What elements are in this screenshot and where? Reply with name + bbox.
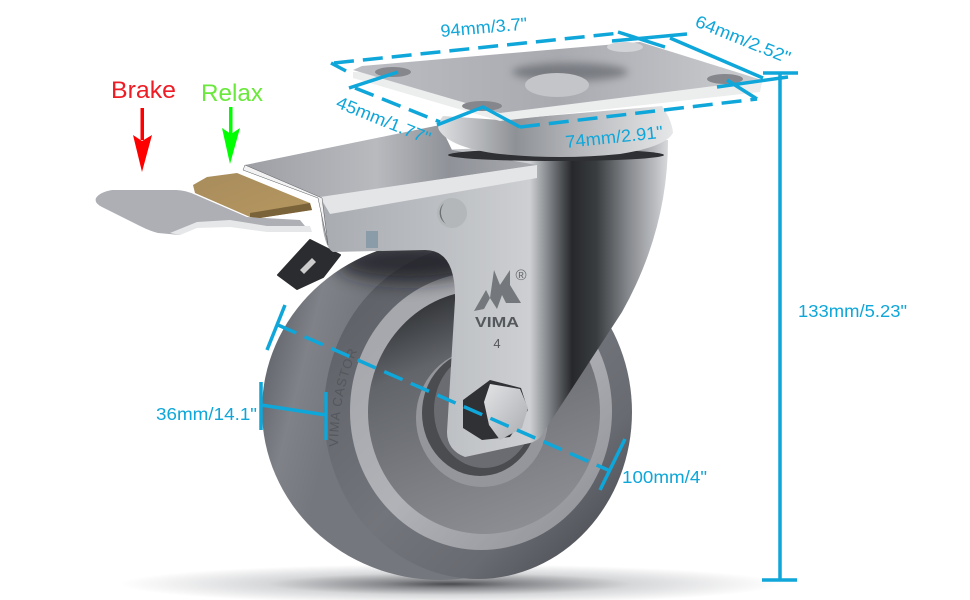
mounting hole front left [462, 101, 502, 111]
hub centre [434, 352, 534, 468]
dimension: hole spacing 74mm [437, 80, 757, 127]
label 74mm: 74mm/2.91" [564, 122, 664, 152]
label 45mm: 45mm/1.77" [334, 92, 434, 148]
floor shadow [120, 564, 780, 600]
plate shading [512, 63, 628, 81]
label 133mm: 133mm/5.23" [798, 301, 907, 321]
axle nut [463, 380, 528, 440]
dimension: tread width 36mm [261, 382, 326, 440]
arm bright fold [320, 165, 537, 214]
plate edge [353, 72, 762, 121]
tire front face [324, 245, 632, 579]
wheel dish [368, 290, 600, 534]
logo emblem [474, 270, 521, 311]
logo text: VIMA [475, 314, 519, 331]
relax label: Relax [201, 80, 263, 107]
mounting hole rear right [607, 42, 643, 52]
brass tab front edge [250, 203, 312, 218]
label 100mm: 100mm/4" [622, 467, 707, 487]
lever pedal [96, 190, 310, 235]
label 94mm: 94mm/3.7" [440, 13, 528, 41]
green relax arrow [222, 107, 240, 164]
label 64mm: 64mm/2.52" [693, 11, 794, 68]
red brake arrow [133, 108, 152, 172]
swivel neck dome [438, 106, 673, 161]
dimension: height 133mm [762, 73, 798, 580]
brand text on tire: VIMA CASTOR [329, 349, 357, 446]
mounting hole front right [707, 74, 743, 84]
lever guard edge [243, 165, 328, 245]
lever pedal edge [170, 220, 312, 235]
registered mark: ® [515, 267, 527, 284]
caster wheel [262, 250, 632, 580]
mounting hole rear left [375, 67, 411, 77]
shadow under arm [335, 242, 485, 282]
dimension: diameter 100mm [267, 305, 625, 490]
centre rivet [525, 73, 589, 97]
label 36mm: 36mm/14.1" [156, 404, 257, 424]
brake label: Brake [111, 77, 176, 104]
small bolt [366, 231, 378, 248]
brass release tab [193, 173, 312, 218]
fork body [320, 140, 668, 457]
logo size number: 4 [493, 336, 501, 351]
hub outer [416, 349, 548, 487]
axle bolt head [484, 384, 528, 440]
tire tread [262, 240, 618, 580]
brake lever [96, 165, 328, 245]
hub inner [422, 350, 538, 476]
black brake clip [278, 240, 340, 289]
rivet [437, 198, 467, 228]
top mounting plate [353, 42, 762, 121]
arm top surface [245, 125, 537, 197]
dimension: plate length 94mm [331, 32, 687, 71]
swivel fork bracket [245, 125, 668, 457]
light rim ring [350, 272, 612, 550]
dimension: hole spacing 45mm [349, 72, 440, 122]
dimension: plate width 64mm [670, 38, 788, 87]
plate top [353, 42, 762, 113]
